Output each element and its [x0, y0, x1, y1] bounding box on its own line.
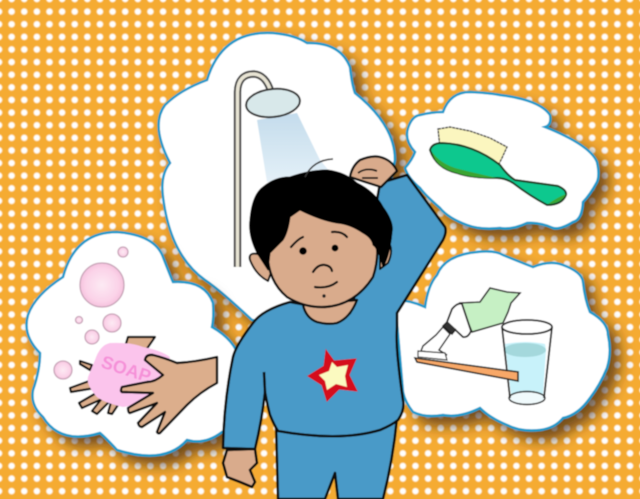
icon: glass of water	[502, 320, 552, 404]
icon: toothbrush	[415, 351, 518, 381]
icon: hairbrush	[430, 127, 566, 205]
boy eyes and brows	[291, 232, 347, 255]
boy sleeve fold	[264, 372, 265, 392]
character: worried boy	[223, 156, 446, 499]
icon: shower	[238, 74, 330, 267]
boy finger lines	[358, 169, 378, 178]
icon: bar of soap	[88, 343, 170, 407]
boy hair strand	[305, 159, 333, 177]
icon: soap bubbles	[54, 247, 128, 379]
boy sweater with raised arm	[223, 175, 446, 449]
panel: shower thought cloud	[159, 33, 395, 325]
panel: soap thought cloud	[26, 232, 240, 456]
boy nose	[313, 265, 332, 272]
icon: back hand fingers	[70, 337, 155, 414]
boy face	[267, 200, 377, 307]
boy star badge	[308, 350, 357, 401]
boy left ear	[250, 254, 272, 281]
boy chin dot	[322, 294, 326, 298]
icon: toothpaste tube	[421, 288, 520, 355]
icon: front hand	[121, 355, 217, 433]
boy right ear	[380, 242, 391, 269]
boy neck	[303, 300, 357, 324]
boy hair	[250, 170, 392, 270]
boy trousers	[276, 418, 397, 499]
panel: hairbrush thought cloud	[405, 92, 598, 229]
panel: toothbrush thought cloud	[395, 251, 610, 430]
boy hand scratching head	[350, 156, 397, 187]
soap label: SOAP	[99, 352, 153, 387]
boy lower hand	[223, 449, 257, 487]
boy mouth	[315, 282, 337, 287]
